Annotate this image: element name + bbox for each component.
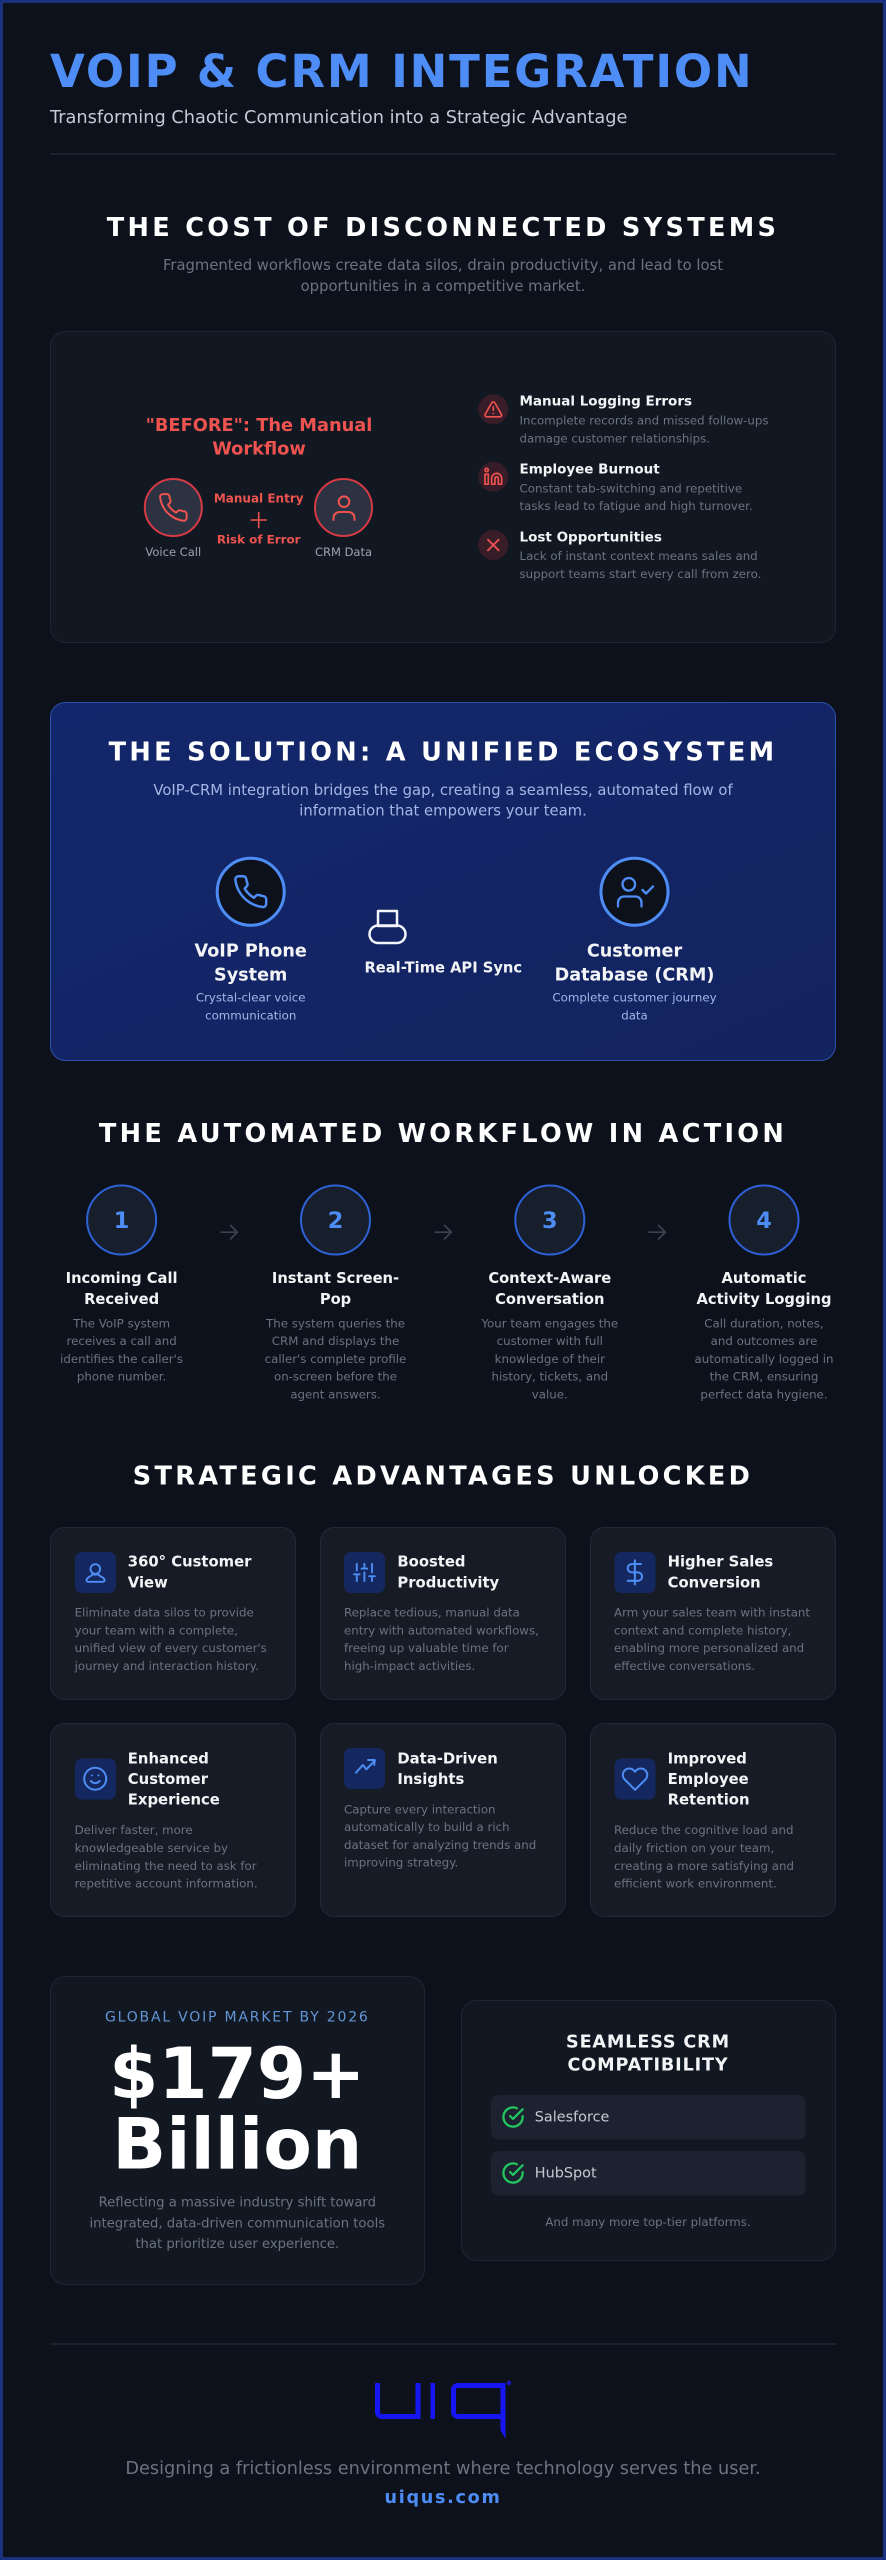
problem: manual logging errors: Incomplete records and missed follow-ups (520, 413, 769, 427)
workflow step 2: The system queries the (265, 1316, 405, 1330)
card: 360 customer view: 360° Customer (128, 1554, 252, 1571)
card: enhanced customer experience: repetitive account information. (75, 1877, 258, 1891)
icon: voice call (145, 479, 202, 559)
workflow step 3: value. (532, 1387, 568, 1401)
footer tagline: Designing a frictionless environment where technology serves the user. (125, 2459, 761, 2479)
card: higher sales conversion: context and complete history, (614, 1623, 791, 1637)
panel: global voip market stat: GLOBAL VOIP MARKET BY 2026 (105, 2010, 370, 2026)
panel: global voip market stat: Reflecting a massive industry shift toward (99, 2196, 376, 2211)
workflow step 4: automatically logged in (695, 1352, 833, 1366)
big number: $179+ (109, 2032, 365, 2115)
workflow step 2: agent answers. (290, 1387, 381, 1401)
card: data-driven insights: Insights (397, 1771, 465, 1788)
problem: lost opportunities: support teams start every call from zero. (520, 567, 761, 581)
row: salesforce: Salesforce (535, 2110, 609, 2126)
node: customer database: Customer (587, 942, 682, 962)
header (49, 45, 754, 128)
node: customer database: Database (CRM) (555, 966, 714, 986)
node: voip phone system: Crystal-clear voice (196, 991, 306, 1005)
card: improved employee retention: Reduce the cognitive load and (614, 1823, 794, 1837)
connector: real-time api sync (364, 911, 522, 976)
card: improved employee retention (590, 1724, 836, 1916)
panel: seamless crm compatibility (462, 2000, 836, 2260)
card: improved employee retention: creating a more satisfying and (614, 1859, 794, 1873)
workflow step 3: customer with full (497, 1334, 603, 1348)
card: data-driven insights (320, 1724, 566, 1916)
card: enhanced customer experience: Customer (128, 1771, 209, 1788)
card: boosted productivity: freeing up valuable time for (344, 1641, 509, 1655)
workflow step 3: history, tickets, and (491, 1370, 608, 1384)
workflow step 4: Automatic (722, 1270, 806, 1287)
card: enhanced customer experience (50, 1724, 296, 1916)
section heading: cost of disconnected systems: opportunities in a competitive market. (301, 278, 585, 295)
manual entry plus risk of error: Manual Entry (214, 492, 304, 506)
workflow step 3: Conversation (495, 1291, 604, 1308)
card: data-driven insights: improving strategy. (344, 1856, 458, 1870)
heading: before workflow: Workflow (212, 438, 306, 460)
card: boosted productivity: Boosted (397, 1554, 466, 1571)
card: higher sales conversion (590, 1528, 836, 1700)
card: higher sales conversion: effective conversations. (614, 1659, 755, 1673)
workflow step 1: Incoming Call (66, 1270, 178, 1287)
card: 360 customer view: journey and interaction history. (74, 1659, 259, 1673)
card: boosted productivity: Productivity (397, 1574, 500, 1591)
footer website: uiqus.com (385, 2488, 501, 2508)
workflow step 4: perfect data hygiene. (700, 1387, 828, 1401)
workflow step 2: Instant Screen- (272, 1270, 399, 1287)
panel: unified ecosystem solution (50, 702, 836, 1060)
card: higher sales conversion: Higher Sales (668, 1554, 773, 1571)
workflow step 2: caller's complete profile (265, 1352, 406, 1366)
card: 360 customer view: your team with a complete, (75, 1623, 238, 1637)
problem: employee burnout: Constant tab-switching and repetitive (520, 481, 742, 495)
node: voip phone system: VoIP Phone (195, 942, 307, 962)
panel: seamless crm compatibility: COMPATIBILITY (568, 2056, 728, 2076)
panel: global voip market stat: integrated, data-driven communication tools (89, 2216, 385, 2231)
heading: solution: information that empowers your team. (299, 803, 587, 820)
card: enhanced customer experience: eliminating the need to ask for (75, 1859, 257, 1873)
workflow step 4: 4 (756, 1208, 772, 1234)
workflow step 3: Context-Aware (488, 1270, 611, 1287)
problem: employee burnout: tasks lead to fatigue and high turnover. (520, 499, 753, 513)
problem: lost opportunities: Lack of instant context means sales and (520, 549, 758, 563)
card: improved employee retention: Retention (668, 1792, 750, 1809)
node: voip phone system: communication (205, 1008, 296, 1022)
card: data-driven insights: Data-Driven (397, 1750, 498, 1767)
connector: real-time api sync: Real-Time API Sync (364, 959, 522, 976)
icon: crm data: CRM Data (315, 545, 372, 559)
workflow step 1 (60, 1186, 183, 1384)
card: data-driven insights: dataset for analyzing trends and (344, 1838, 536, 1852)
workflow step 1: Received (84, 1291, 159, 1308)
node: customer database: data (621, 1008, 648, 1022)
heading: solution: THE SOLUTION: A UNIFIED ECOSYSTEM (109, 738, 777, 768)
card: boosted productivity (320, 1528, 566, 1700)
card: enhanced customer experience: Enhanced (128, 1750, 209, 1767)
big number (109, 2032, 365, 2186)
section heading: strategic advantages: STRATEGIC ADVANTAGES UNLOCKED (133, 1461, 753, 1491)
row: salesforce (491, 2095, 806, 2140)
heading: before workflow (146, 415, 372, 460)
workflow step 1: The VoIP system (72, 1316, 170, 1330)
workflow step 2 (265, 1186, 406, 1401)
node: customer database: Complete customer journey (552, 991, 717, 1005)
workflow step 4: the CRM, ensuring (710, 1370, 818, 1384)
card: enhanced customer experience: knowledgeable service by (75, 1841, 228, 1855)
card: improved employee retention: efficient work environment. (614, 1877, 777, 1891)
problem: lost opportunities: Lost Opportunities (520, 529, 662, 545)
problem: manual logging errors: damage customer relationships. (520, 431, 710, 445)
workflow step 2: on-screen before the (274, 1370, 397, 1384)
workflow step 1: 1 (114, 1208, 129, 1234)
row: hubspot: HubSpot (535, 2166, 597, 2182)
card: enhanced customer experience: Deliver faster, more (75, 1823, 193, 1837)
card: boosted productivity: entry with automated workflows, (344, 1623, 539, 1637)
section heading: cost of disconnected systems: THE COST OF DISCONNECTED SYSTEMS (107, 213, 779, 243)
card: data-driven insights: Capture every interaction (344, 1802, 496, 1816)
footer logo (378, 2381, 511, 2439)
arrow (221, 1225, 237, 1239)
problem: employee burnout (478, 462, 753, 513)
arrow (649, 1225, 665, 1239)
card: improved employee retention: daily friction on your team, (614, 1841, 774, 1855)
workflow step 3: Your team engages the (480, 1316, 618, 1330)
workflow step 1: identifies the caller's (60, 1352, 183, 1366)
card: enhanced customer experience: Experience (128, 1792, 220, 1809)
card: data-driven insights: automatically to build a rich (344, 1820, 510, 1834)
workflow step 2: 2 (328, 1208, 343, 1234)
icon: voice call: Voice Call (145, 545, 201, 559)
panel: seamless crm compatibility: SEAMLESS CRM (566, 2032, 730, 2052)
section heading: automated workflow: THE AUTOMATED WORKFLOW IN ACTION (99, 1119, 787, 1149)
problem: manual logging errors: Manual Logging Errors (520, 394, 692, 410)
workflow step 2: Pop (320, 1291, 351, 1308)
workflow step 4: Activity Logging (697, 1291, 831, 1308)
card: boosted productivity: Replace tedious, manual data (344, 1606, 520, 1620)
problem: lost opportunities (478, 529, 761, 581)
title: VOIP & CRM INTEGRATION (50, 45, 754, 98)
workflow step 3: 3 (542, 1208, 558, 1234)
card: improved employee retention: Employee (668, 1771, 749, 1788)
heading: solution: VoIP-CRM integration bridges the gap, creating a seamless, automated flow of (153, 782, 733, 799)
heading: before workflow: "BEFORE": The Manual (146, 415, 372, 436)
workflow step 3 (480, 1186, 618, 1401)
node: customer database (552, 858, 717, 1022)
panel: before manual workflow (50, 332, 836, 642)
card: improved employee retention: Improved (668, 1750, 747, 1767)
panel: global voip market stat: that prioritize user experience. (135, 2237, 339, 2252)
card: higher sales conversion: enabling more personalized and (614, 1641, 804, 1655)
heading: solution (109, 738, 777, 820)
workflow step 4 (695, 1186, 833, 1401)
workflow step 1: receives a call and (66, 1334, 177, 1348)
node: voip phone system (195, 858, 307, 1022)
card: 360 customer view: unified view of every customer's (75, 1641, 267, 1655)
arrow (435, 1225, 451, 1239)
panel: seamless crm compatibility: And many more top-tier platforms. (545, 2215, 751, 2229)
subtitle: Transforming Chaotic Communication into a Strategic Advantage (49, 108, 627, 128)
row: hubspot (491, 2151, 806, 2196)
card: boosted productivity: high-impact activities. (344, 1659, 475, 1673)
card: higher sales conversion: Conversion (668, 1574, 761, 1591)
node: voip phone system: System (214, 966, 287, 986)
card: 360 customer view (50, 1528, 296, 1700)
workflow step 1: phone number. (77, 1370, 166, 1384)
big number: Billion (112, 2103, 362, 2186)
manual entry plus risk of error: Risk of Error (217, 533, 301, 547)
card: 360 customer view: Eliminate data silos to provide (75, 1606, 254, 1620)
workflow step 4: Call duration, notes, (704, 1316, 824, 1330)
section heading: cost of disconnected systems (107, 213, 779, 295)
problem: employee burnout: Employee Burnout (520, 462, 660, 478)
icon: crm data (315, 479, 372, 559)
workflow step 2: CRM and displays the (272, 1334, 399, 1348)
panel: global voip market stat (50, 1976, 424, 2284)
problem: manual logging errors (478, 394, 769, 445)
workflow step 4: and outcomes are (711, 1334, 817, 1348)
card: higher sales conversion: Arm your sales team with instant (614, 1606, 810, 1620)
manual entry plus risk of error (214, 492, 304, 547)
workflow step 3: knowledge of their (495, 1352, 605, 1366)
card: 360 customer view: View (128, 1574, 168, 1591)
section heading: cost of disconnected systems: Fragmented workflows create data silos, drain productivity, and lead to lost (163, 257, 723, 274)
